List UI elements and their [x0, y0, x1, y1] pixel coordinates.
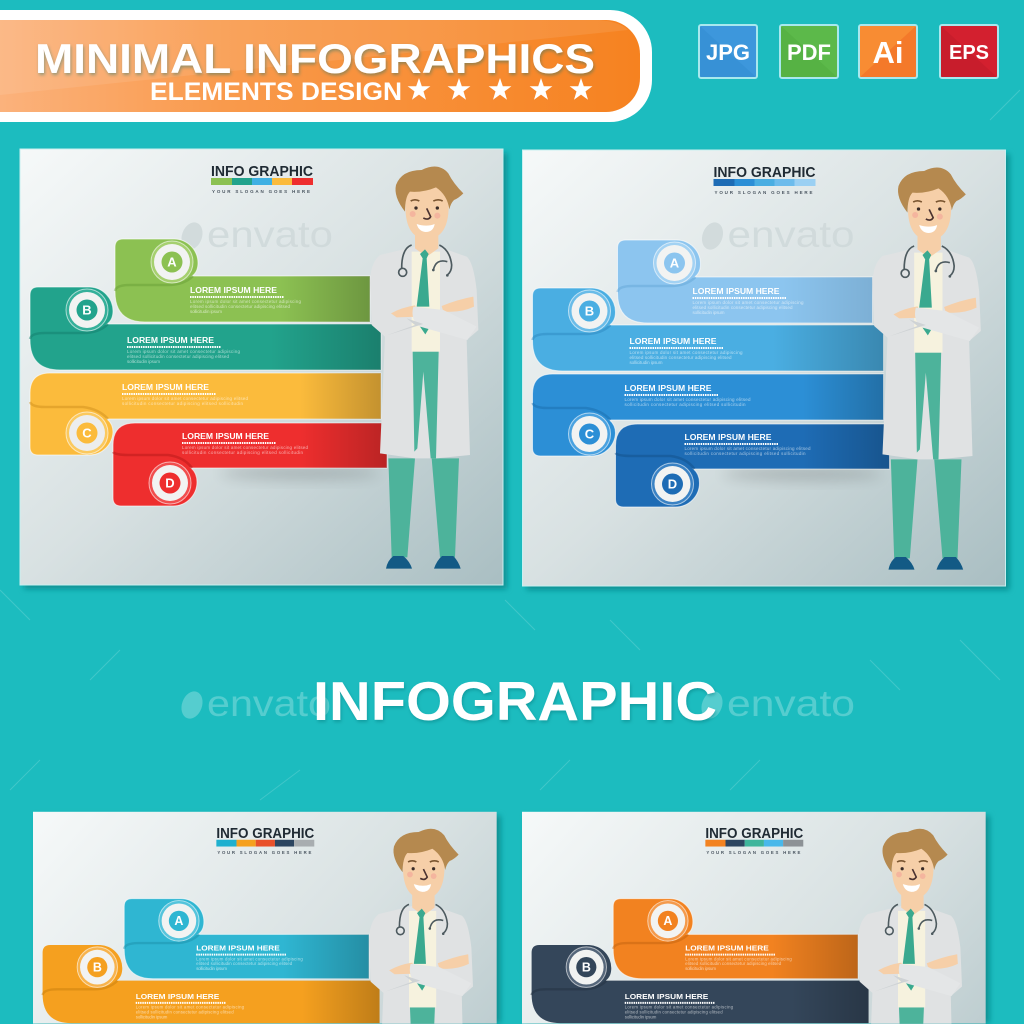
- header banner: [0, 10, 652, 122]
- ribbon C: sollicitudin consectetur adipiscing elitsed sollicitudin: [122, 401, 243, 406]
- ribbon A: [613, 899, 858, 979]
- panel: green red doctor infographic: [20, 149, 507, 589]
- panel heading: INFO GRAPHIC: [714, 164, 816, 181]
- format badges: [699, 25, 998, 78]
- ribbon B: LOREM IPSUM HERE: [630, 337, 717, 346]
- ribbon A: LOREM IPSUM HERE: [685, 944, 769, 953]
- ribbon A: LOREM IPSUM HERE: [692, 287, 780, 296]
- ribbon B: [43, 945, 380, 1023]
- ribbon B: Lorem ipsum dolor sit amet consectetur adipiscing: [136, 1005, 245, 1010]
- ribbon A: sollicitudin ipsum: [190, 309, 222, 314]
- ribbon D: Lorem ipsum dolor sit amet consectetur adipiscing elitsed: [684, 446, 811, 451]
- ribbon B: B: [585, 304, 594, 318]
- ribbon A: elitsed sollicitudin consectetur adipiscing elitsed: [692, 305, 793, 310]
- badge: EPS: [940, 25, 998, 78]
- ribbon B: elitsed sollicitudin consectetur adipiscing elitsed: [127, 354, 229, 359]
- ribbon C: [30, 373, 381, 455]
- ribbon C: C: [82, 426, 92, 440]
- ribbon B: LOREM IPSUM HERE: [625, 992, 708, 1001]
- ribbon B: elitsed sollicitudin consectetur adipiscing elitsed: [630, 355, 732, 360]
- panel: blue doctor infographic: [522, 150, 1010, 590]
- badge: JPG: [699, 25, 757, 78]
- ribbon B: [532, 288, 884, 371]
- ribbon B: elitsed sollicitudin consectetur adipiscing elitsed: [136, 1009, 234, 1014]
- ribbon A: elitsed sollicitudin consectetur adipiscing elitsed: [685, 961, 782, 966]
- ribbon D: sollicitudin consectetur adipiscing elitsed sollicitudin: [684, 451, 806, 456]
- banner subtitle: ELEMENTS DESIGN: [150, 78, 402, 106]
- panel heading: INFO GRAPHIC: [216, 826, 315, 842]
- ribbon D: sollicitudin consectetur adipiscing elitsed sollicitudin: [182, 450, 303, 455]
- ribbon A: Lorem ipsum dolor sit amet consectetur adipiscing: [692, 300, 804, 305]
- envato watermark: envato: [207, 214, 333, 255]
- panel heading: INFO GRAPHIC: [705, 826, 804, 842]
- ribbon B: sollicitudin ipsum: [136, 1014, 168, 1019]
- ribbon B: B: [582, 960, 591, 975]
- ribbon A: [124, 899, 369, 979]
- ribbon B: B: [93, 960, 102, 975]
- ribbon B: Lorem ipsum dolor sit amet consectetur adipiscing: [127, 349, 240, 354]
- ribbon B: sollicitudin ipsum: [127, 359, 160, 364]
- ribbon B: LOREM IPSUM HERE: [127, 336, 215, 345]
- ribbon A: [115, 239, 370, 322]
- doctor: [858, 829, 962, 1024]
- ribbon A: [618, 240, 872, 323]
- ribbon A: elitsed sollicitudin consectetur adipiscing elitsed: [190, 304, 290, 309]
- panel heading: [216, 826, 315, 855]
- ribbon D: Lorem ipsum dolor sit amet consectetur adipiscing elitsed: [182, 445, 308, 450]
- ribbon A: LOREM IPSUM HERE: [196, 944, 280, 953]
- badge: EPS: EPS: [949, 42, 989, 64]
- ribbon B: [30, 287, 381, 370]
- doctor: [369, 829, 473, 1024]
- panel heading: YOUR SLOGAN GOES HERE: [706, 850, 801, 855]
- ribbon A: A: [174, 914, 183, 928]
- ribbon D: D: [165, 476, 175, 490]
- ribbon C: LOREM IPSUM HERE: [624, 384, 712, 393]
- envato watermark right: envato: [727, 683, 855, 724]
- ribbon C: C: [585, 426, 595, 442]
- ribbon B: sollicitudin ipsum: [630, 360, 663, 365]
- ribbon B: [532, 945, 869, 1023]
- badge: PDF: [780, 25, 838, 78]
- ribbon A: sollicitudin ipsum: [692, 310, 725, 315]
- ribbon A: sollicitudin ipsum: [685, 966, 716, 971]
- ribbon D: LOREM IPSUM HERE: [684, 433, 772, 442]
- panel: teal orange doctor infographic: [33, 812, 501, 1024]
- ribbon B: Lorem ipsum dolor sit amet consectetur adipiscing: [625, 1005, 734, 1010]
- ribbon A: Lorem ipsum dolor sit amet consectetur adipiscing: [190, 299, 301, 304]
- panel heading: [714, 164, 816, 195]
- ribbon B: elitsed sollicitudin consectetur adipiscing elitsed: [625, 1009, 723, 1014]
- ribbon D: D: [668, 476, 677, 492]
- ribbon A: A: [670, 256, 680, 270]
- doctor: [370, 167, 478, 569]
- envato watermark left: envato: [207, 683, 331, 724]
- envato watermark: envato: [728, 214, 854, 255]
- panel heading: [211, 163, 313, 194]
- ribbon A: sollicitudin ipsum: [196, 966, 227, 971]
- banner title: MINIMAL INFOGRAPHICS: [35, 35, 595, 82]
- section title: INFOGRAPHIC: [313, 670, 717, 732]
- ribbon D: [616, 424, 890, 507]
- badge: JPG: JPG: [706, 40, 750, 65]
- ribbon D: [113, 423, 387, 506]
- badge: PDF: PDF: [787, 40, 831, 65]
- ribbon A: elitsed sollicitudin consectetur adipiscing elitsed: [196, 961, 293, 966]
- ribbon C: Lorem ipsum dolor sit amet consectetur adipiscing elitsed: [122, 396, 248, 401]
- panel heading: INFO GRAPHIC: [211, 163, 313, 180]
- badge: Ai: Ai: [872, 35, 904, 70]
- panel: orange navy doctor infographic: [522, 812, 990, 1024]
- ribbon C: Lorem ipsum dolor sit amet consectetur adipiscing elitsed: [624, 397, 751, 402]
- doctor: [872, 168, 981, 570]
- ribbon C: sollicitudin consectetur adipiscing elitsed sollicitudin: [624, 402, 746, 407]
- ribbon D: LOREM IPSUM HERE: [182, 432, 270, 441]
- badge: Ai: [859, 25, 917, 78]
- panel heading: YOUR SLOGAN GOES HERE: [212, 189, 310, 194]
- ribbon B: B: [82, 302, 92, 318]
- ribbon C: [532, 374, 884, 456]
- ribbon A: A: [167, 254, 177, 270]
- ribbon B: sollicitudin ipsum: [625, 1014, 657, 1019]
- ribbon A: Lorem ipsum dolor sit amet consectetur adipiscing: [196, 956, 303, 961]
- panel heading: [705, 826, 804, 855]
- ribbon C: LOREM IPSUM HERE: [122, 383, 210, 392]
- panel heading: YOUR SLOGAN GOES HERE: [714, 190, 812, 195]
- ribbon B: LOREM IPSUM HERE: [136, 992, 219, 1001]
- ribbon B: Lorem ipsum dolor sit amet consectetur adipiscing: [630, 350, 743, 355]
- ribbon A: Lorem ipsum dolor sit amet consectetur adipiscing: [685, 956, 792, 961]
- panel heading: YOUR SLOGAN GOES HERE: [217, 850, 312, 855]
- ribbon A: LOREM IPSUM HERE: [190, 286, 278, 295]
- rating stars: [408, 78, 592, 100]
- ribbon A: A: [663, 914, 672, 928]
